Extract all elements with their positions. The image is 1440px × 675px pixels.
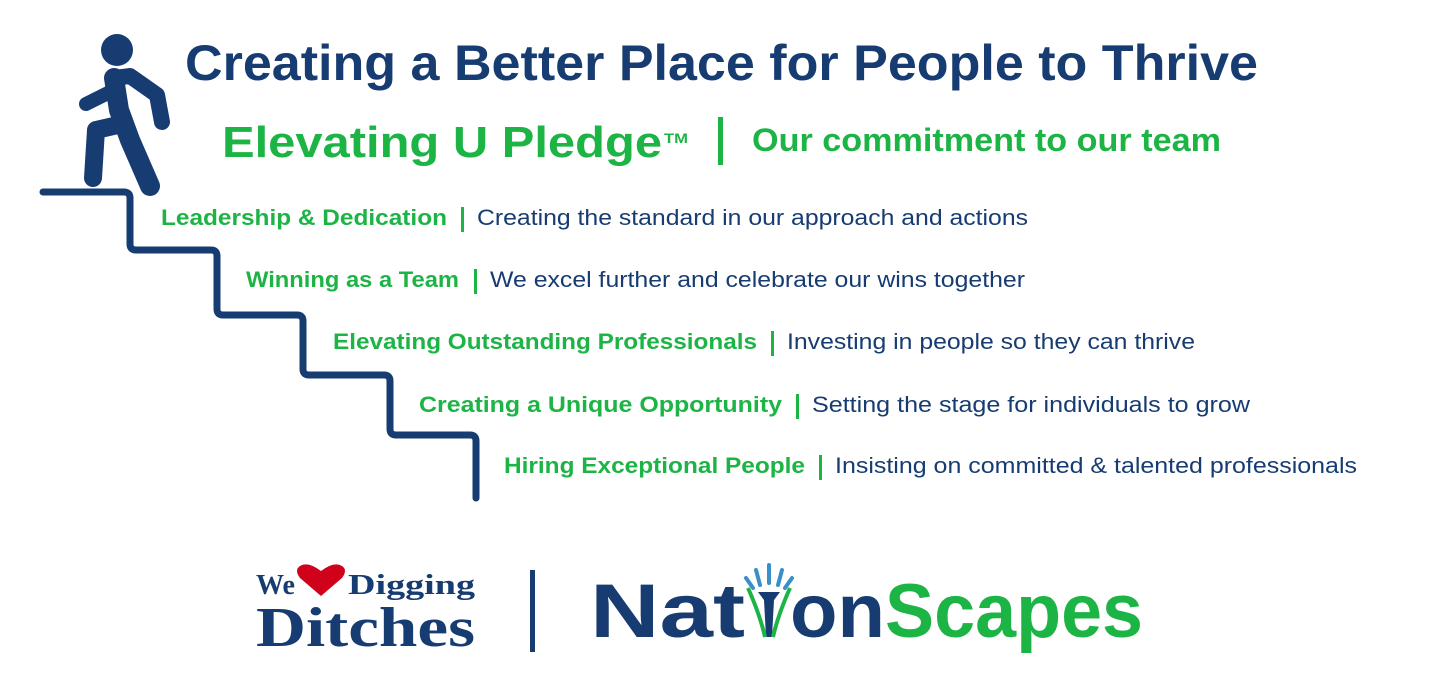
step 3: Elevating Outstanding Professionals bbox=[333, 329, 757, 354]
logo: We Love Digging Ditches bbox=[256, 564, 475, 659]
step 3 bbox=[333, 329, 1195, 356]
logo: We Love Digging Ditches: Ditches bbox=[256, 597, 475, 659]
icon: person climbing bbox=[86, 34, 162, 186]
logo: NationScapes: Scapes bbox=[885, 569, 1143, 654]
step 4: Setting the stage for individuals to grow bbox=[812, 392, 1250, 417]
step 1: Leadership & Dedication bbox=[161, 205, 447, 230]
step 3: Investing in people so they can thrive bbox=[787, 329, 1195, 354]
icon: sprinkler bbox=[746, 565, 792, 637]
logo: NationScapes: on bbox=[790, 569, 885, 654]
step 5: Hiring Exceptional People bbox=[504, 453, 805, 478]
step 5 bbox=[504, 453, 1357, 480]
step 4: Creating a Unique Opportunity bbox=[419, 392, 783, 417]
subtitle: Elevating U Pledge bbox=[222, 118, 662, 167]
step 5: Insisting on committed & talented professionals bbox=[835, 453, 1357, 478]
step 1 bbox=[161, 205, 1028, 232]
step 2: We excel further and celebrate our wins together bbox=[490, 267, 1025, 292]
logo: NationScapes: Nat bbox=[590, 569, 745, 654]
logo: NationScapes bbox=[590, 565, 1143, 654]
logo: We Love Digging Ditches: Digging bbox=[348, 570, 475, 601]
title: Creating a Better Place for People to Thrive bbox=[185, 35, 1258, 91]
logo: We Love Digging Ditches: We bbox=[256, 570, 295, 601]
step 1: Creating the standard in our approach and actions bbox=[477, 205, 1028, 230]
subtitle: TM bbox=[664, 130, 688, 146]
subtitle bbox=[222, 117, 1221, 167]
stairs bbox=[43, 192, 476, 498]
step 4 bbox=[419, 392, 1250, 419]
step 2: Winning as a Team bbox=[246, 267, 459, 292]
divider bar bbox=[530, 570, 535, 652]
subtitle: Our commitment to our team bbox=[752, 122, 1221, 158]
step 2 bbox=[246, 267, 1025, 294]
